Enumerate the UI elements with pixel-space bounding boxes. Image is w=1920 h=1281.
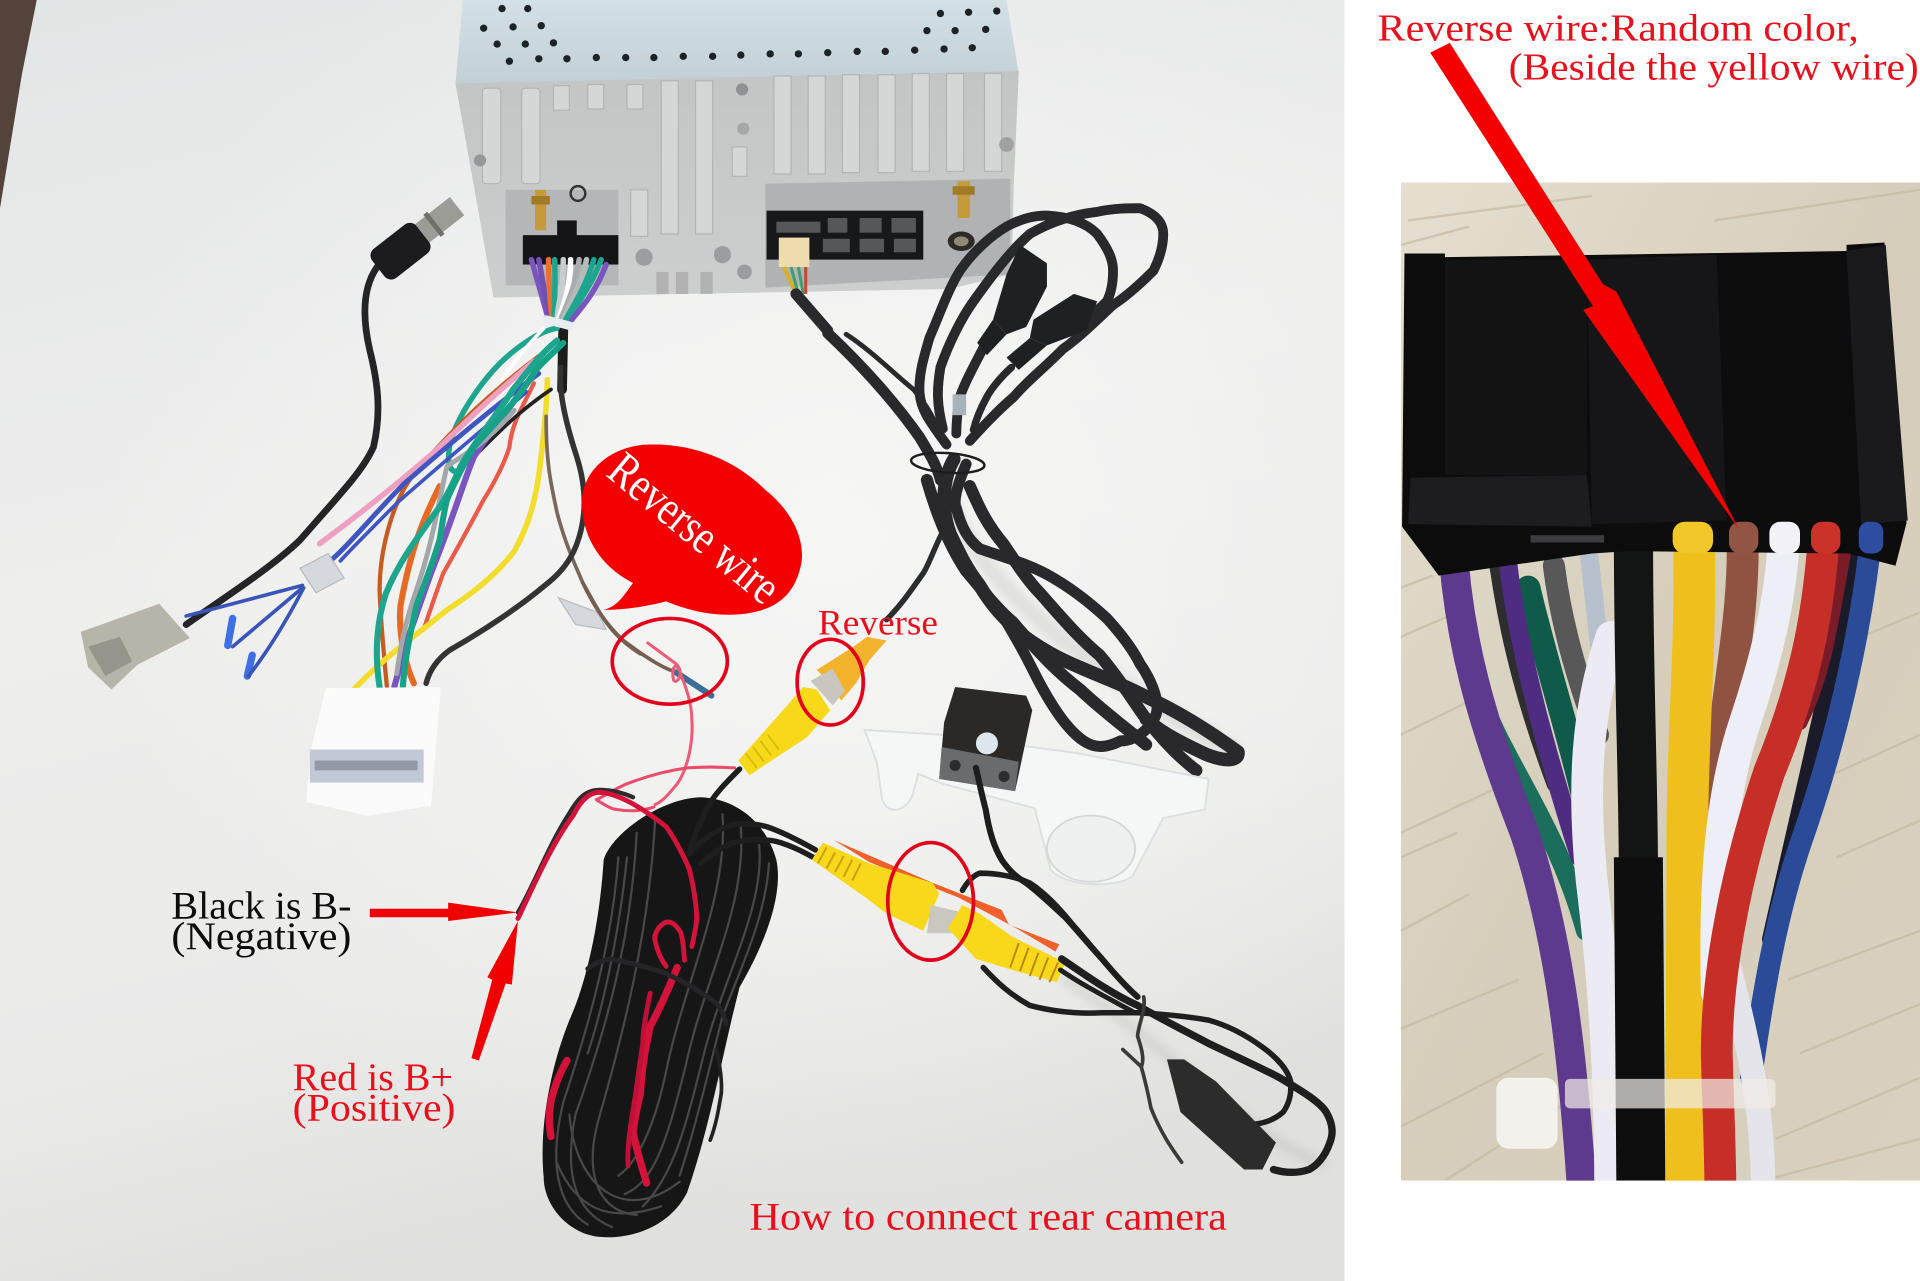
- top cover plate with vent holes: [456, 0, 1019, 83]
- black connector housing: [1402, 242, 1908, 576]
- right recess: [765, 179, 1010, 288]
- cable tie: [1496, 1078, 1776, 1149]
- thick black cable loops: [828, 208, 1238, 770]
- camera power loop wires: [518, 767, 735, 912]
- black shrink-wrapped wire: [1614, 539, 1665, 1181]
- cable zip tie and tag: [910, 394, 985, 475]
- black cable coil with red lead: [518, 769, 816, 1237]
- callout rings: [612, 618, 973, 960]
- yellow plug: [779, 238, 809, 294]
- photo backdrop: [0, 0, 1344, 1281]
- cable: lower bundle: [927, 480, 1146, 745]
- title: how to connect rear camera: How to connect rear camera: [749, 1196, 1227, 1239]
- white wire beside brown: [1716, 529, 1784, 992]
- heading: reverse wire colour note: Reverse wire:Random color,: [1378, 7, 1859, 49]
- red wire: [1717, 529, 1824, 1194]
- ring: lower RCA: [888, 843, 973, 960]
- label: Reverse: Reverse: [818, 602, 938, 642]
- label: red is positive: (Positive): [293, 1087, 456, 1130]
- right socket block: [767, 211, 923, 260]
- cooling fins: [482, 73, 1002, 236]
- label: red is positive: [293, 1056, 456, 1130]
- wood background: [1401, 182, 1920, 1181]
- reverse speech bubble: Reverse wire: [598, 441, 792, 615]
- label: black is negative: [171, 884, 351, 958]
- ferrite beads: [977, 245, 1097, 370]
- black reverse lead: [887, 534, 942, 620]
- head unit: [456, 0, 1019, 298]
- reverse wire knot: [583, 583, 711, 805]
- cable: from ferrites to tie: [956, 343, 986, 434]
- cable: upper loop 1: [919, 216, 1113, 445]
- white harness connector: [306, 687, 441, 816]
- wire tag labels: [300, 554, 606, 629]
- lower RCA pair: [812, 840, 1065, 982]
- plug lead and junction: [796, 294, 828, 331]
- label: black is negative: (Negative): [171, 915, 351, 958]
- panel: connector close-up photo: [1401, 182, 1920, 1194]
- cable: from plug to tie: [828, 333, 940, 480]
- heading: reverse wire colour note: (Beside the yellow wire): [1509, 47, 1919, 89]
- cable: upper loop 2: [938, 208, 1163, 441]
- arrow: reverse wire pointer: [1430, 43, 1739, 529]
- left recess: [506, 190, 618, 285]
- left harness plug: [523, 220, 618, 265]
- wiring harness: [320, 260, 640, 689]
- lower right camera cable loops: [962, 873, 1332, 1172]
- back row wires: [1477, 529, 1855, 939]
- antenna cable and plug: [186, 192, 469, 625]
- rear aluminium panel: [456, 71, 1019, 298]
- label: black is negative: Black is B-: [171, 884, 351, 927]
- upper reverse RCA connector: [738, 637, 887, 775]
- ring: reverse wire knot: [612, 618, 727, 704]
- arrow: black wire: [370, 903, 518, 921]
- ring: reverse RCA: [797, 639, 863, 725]
- yellow wire: [1686, 529, 1694, 1194]
- wire tops at housing: [1673, 522, 1883, 554]
- screws and vent details: [474, 83, 1014, 294]
- arrow: red wire: [471, 921, 518, 1061]
- rear camera with license plate bracket: [864, 687, 1209, 997]
- side wires: [1452, 527, 1872, 1194]
- grey side connector: [81, 585, 304, 689]
- harness fan above tie: [531, 260, 606, 320]
- heading: reverse wire colour note: [1378, 7, 1919, 89]
- label: red is positive: Red is B+: [293, 1056, 453, 1099]
- reverse speech bubble: [582, 441, 802, 615]
- gold antenna connectors: [531, 181, 975, 251]
- panel: main photo of head unit and wiring: [0, 0, 1344, 1281]
- soft shadows under cables: [945, 490, 1322, 1163]
